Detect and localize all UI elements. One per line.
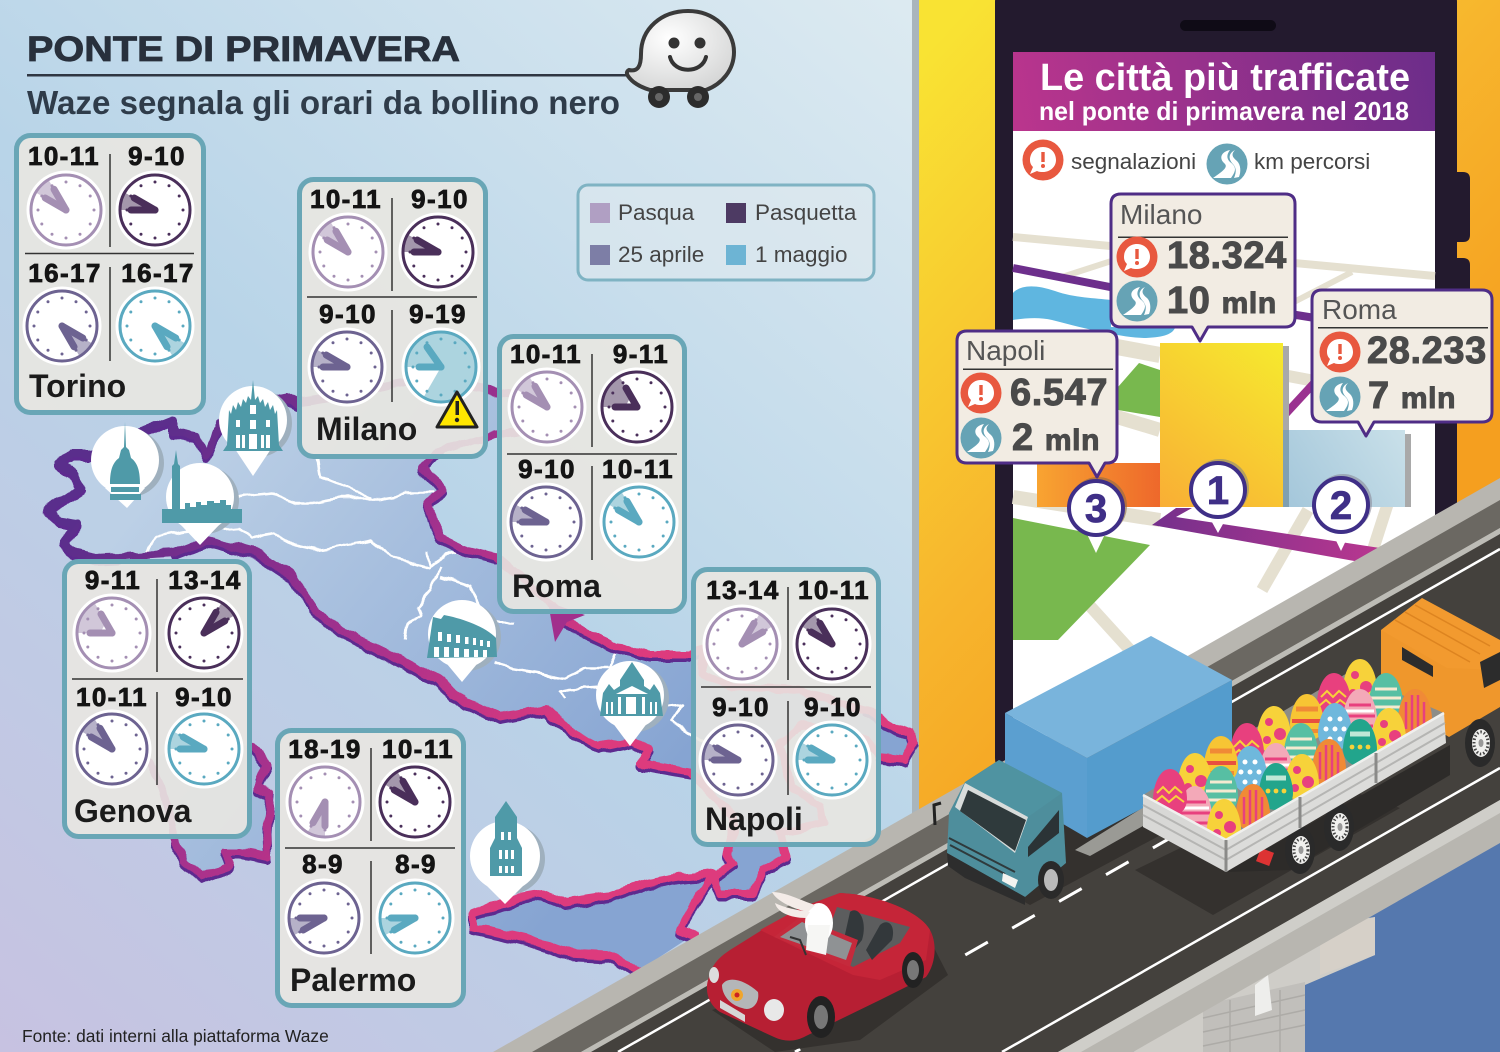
trailer sides [1143, 713, 1446, 872]
pin: Palermo [470, 801, 545, 904]
title: PONTE DI PRIMAVERA [27, 30, 460, 69]
callout: Napoli: 6.547 [1010, 372, 1108, 414]
title rule [27, 74, 632, 76]
trailer bed [1143, 672, 1444, 840]
panel: Torino: 10-11 [28, 141, 100, 171]
panel: Roma: 10-11 [510, 339, 582, 369]
map of Italy [47, 375, 913, 973]
callout: Milano [1111, 194, 1295, 341]
phone legend [1022, 140, 1370, 184]
panel: Torino: 16-17 [28, 258, 102, 288]
pin: Napoli [596, 661, 669, 746]
clock: Roma 25 aprile [506, 482, 586, 562]
clock: Milano Pasqua [308, 212, 388, 292]
pin: Milano duomo [219, 380, 292, 476]
red convertible car with bunny [707, 892, 948, 1052]
eggs [1153, 659, 1432, 846]
land fill [47, 375, 913, 970]
panel: Napoli: 13-14 [706, 575, 780, 605]
clock: Milano 25 aprile [308, 328, 386, 406]
callout: Roma: 7 mln [1368, 375, 1456, 417]
panel: Torino: 16-17 [121, 258, 195, 288]
panel: Genova: 13-14 [168, 565, 242, 595]
callout: Napoli: Napoli [966, 335, 1045, 366]
callout: Napoli: 2 mln [1012, 417, 1100, 459]
callout: Napoli [957, 331, 1117, 477]
panel: Milano: 9-10 [319, 299, 377, 329]
arrow head [548, 602, 585, 642]
clock: Palermo 25 aprile [284, 878, 364, 958]
clock: Milano Pasquetta [398, 212, 478, 292]
callout: Milano: 18.324 [1167, 235, 1287, 277]
legend: 25 aprile [618, 242, 704, 267]
legend: Pasquetta [755, 200, 857, 225]
viaduct pillar [1133, 917, 1375, 1052]
panel: Palermo [278, 730, 464, 1006]
panel: Torino: 9-10 [128, 141, 186, 171]
clock: Napoli Pasquetta [792, 604, 872, 684]
phone map [1013, 237, 1435, 650]
panel: Roma: 10-11 [602, 454, 674, 484]
clock: Roma 1 maggio [600, 482, 678, 562]
smartphone [957, 0, 1492, 780]
clock: Palermo Pasqua [286, 762, 364, 842]
panel: Genova: 10-11 [76, 682, 148, 712]
clock: Palermo 1 maggio [376, 878, 454, 958]
rank badge 1 [1191, 459, 1249, 533]
rank badge 2: 2 [1330, 484, 1352, 528]
clock: Roma Pasqua [508, 368, 586, 446]
panel: Genova [64, 562, 250, 836]
rank badge 2 [1314, 474, 1372, 551]
panel: Napoli: Napoli [705, 801, 803, 837]
panel: Genova: 9-11 [85, 565, 141, 595]
clock: Napoli 25 aprile [698, 720, 778, 800]
phone header: Le città più trafficate [1040, 57, 1410, 99]
regional borders [147, 460, 710, 745]
clock: Genova Pasqua [72, 594, 152, 672]
phone header [1013, 52, 1435, 131]
bar chart [1037, 343, 1411, 507]
panel: Milano [300, 180, 486, 456]
panel: Roma: 9-10 [518, 454, 576, 484]
phone header: nel ponte di primavera nel 2018 [1039, 96, 1409, 126]
panel: Roma: Roma [512, 568, 601, 604]
flatbed trailer with eggs [1135, 598, 1500, 915]
callout: Milano: Milano [1120, 199, 1202, 230]
panel: Palermo: Palermo [290, 962, 416, 998]
panel: Milano: 9-10 [411, 184, 469, 214]
rank badge 3 [1069, 477, 1127, 553]
background: blue under viaduct [1133, 830, 1500, 1052]
highway [493, 478, 1500, 1052]
icon: warning triangle [437, 392, 477, 427]
clock: Torino Pasqua [26, 170, 106, 250]
panel: Milano: Milano [316, 411, 417, 447]
rank badge 1: 1 [1207, 469, 1229, 513]
panel: Napoli [694, 570, 878, 844]
source note: Fonte: dati interni alla piattaforma Waze [22, 1026, 329, 1046]
divider stripe [912, 0, 919, 820]
coastline [47, 375, 913, 970]
clock: Genova 25 aprile [72, 710, 152, 788]
background: yellow side [919, 0, 1500, 900]
callout: Roma [1312, 290, 1492, 436]
clock: Milano 1 maggio [402, 328, 480, 406]
pin: Torino [91, 422, 164, 508]
panel: Genova: Genova [74, 793, 192, 829]
panel: Palermo: 8-9 [302, 849, 344, 879]
pin: Roma colosseo [427, 600, 501, 682]
callout: Roma: 28.233 [1367, 330, 1487, 372]
clock: Napoli 1 maggio [792, 720, 872, 800]
panel: Roma: 9-11 [613, 339, 669, 369]
legend: 1 maggio [755, 242, 848, 267]
pin: Genova [162, 450, 242, 545]
callout: Milano: 10 mln [1167, 280, 1277, 322]
clock: Torino 25 aprile [22, 286, 102, 366]
panel: Roma [500, 336, 684, 612]
panel: Napoli: 9-10 [712, 692, 770, 722]
legend: Pasqua [618, 200, 695, 225]
wheels [1256, 803, 1354, 874]
panel: Milano: 10-11 [310, 184, 382, 214]
callout: Roma: Roma [1322, 294, 1397, 325]
subtitle: Waze segnala gli orari da bollino nero [27, 84, 620, 121]
panel: Genova: 9-10 [175, 682, 233, 712]
truck: blue van [934, 636, 1238, 905]
phone legend: km percorsi [1254, 149, 1370, 174]
panel: Palermo: 10-11 [382, 734, 454, 764]
panel: Napoli: 9-10 [804, 692, 862, 722]
rank badge 3: 3 [1085, 487, 1107, 531]
background: map side [0, 0, 912, 1052]
cab [934, 760, 1066, 905]
panel: Torino: Torino [29, 368, 126, 404]
cargo box [1005, 636, 1232, 838]
panel: Palermo: 18-19 [288, 734, 362, 764]
clock: Torino 1 maggio [116, 286, 194, 366]
clock: Genova 1 maggio [164, 710, 244, 788]
clock: Roma Pasquetta [598, 368, 676, 446]
icon: Waze mascot [627, 11, 734, 108]
panel: Palermo: 8-9 [395, 849, 437, 879]
panel: Milano: 9-19 [409, 299, 467, 329]
clock: Palermo Pasquetta [376, 762, 454, 842]
panel: Napoli: 10-11 [798, 575, 870, 605]
phone legend: segnalazioni [1071, 149, 1196, 174]
coastline shadow [47, 401, 913, 973]
orange cab [1381, 598, 1500, 767]
legend [578, 185, 874, 280]
clock: Genova Pasquetta [164, 594, 244, 672]
panel: Torino [16, 136, 204, 412]
clock: Torino Pasquetta [116, 170, 194, 250]
clock: Napoli Pasqua [702, 604, 782, 684]
